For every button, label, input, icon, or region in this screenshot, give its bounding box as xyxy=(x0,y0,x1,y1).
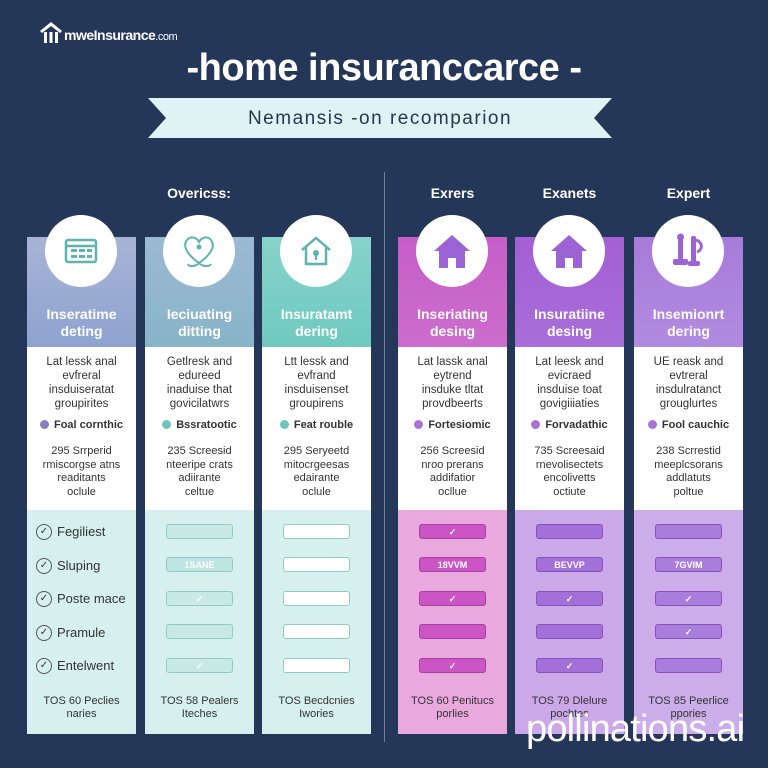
panel: column 5: Insuratiine xyxy=(534,306,605,322)
text: Expert xyxy=(667,185,710,201)
panel: column 6: dering xyxy=(667,323,710,339)
panel: column 2: 1SANE xyxy=(184,560,214,570)
panel: column 6: 7GVIM xyxy=(674,560,702,570)
panel: column 6: TOS 85 Peerlice xyxy=(648,695,729,707)
divider xyxy=(384,172,385,742)
panel: column 3: Iwories xyxy=(299,708,334,720)
panel: column 2: 235 Screesid xyxy=(167,445,232,457)
panel: column 4: TOS 60 Penitucs xyxy=(411,695,494,707)
icon: house xyxy=(416,215,488,287)
panel: column 2: ditting xyxy=(178,323,221,339)
logo: mweInsurance.com xyxy=(64,27,177,43)
panel: column 6: insdulratanct xyxy=(656,384,721,396)
panel: column 2 xyxy=(145,215,254,734)
panel: column 3: Ltt lessk and xyxy=(284,356,349,368)
panel: column 4: insduke tltat xyxy=(422,384,483,396)
panel: column 5: insduise toat xyxy=(537,384,602,396)
panel: column 1: Sluping xyxy=(57,558,100,573)
panel: column 2: inaduise that xyxy=(167,384,232,396)
panel: column 6: Insemionrt xyxy=(653,306,724,322)
panel: column 2: edureed xyxy=(178,370,221,382)
panel: column 2: celtue xyxy=(185,486,214,498)
panel: column 6: ppories xyxy=(670,708,707,720)
panel: column 4: porlies xyxy=(436,708,469,720)
banner ribbon: Nemansis -on recomparion xyxy=(248,108,512,129)
panel: column 1: ✓ xyxy=(40,560,48,570)
panel: column 4: Lat lassk anal xyxy=(417,356,488,368)
panel: column 5: encolivetts xyxy=(544,472,595,484)
panel: column 1: readitants xyxy=(57,472,106,484)
panel: column 1 xyxy=(27,215,136,734)
panel: column 1: deting xyxy=(60,323,102,339)
panel: column 5: BEVVP xyxy=(554,560,585,570)
panel: column 3: groupirens xyxy=(289,398,344,410)
logo xyxy=(40,22,177,43)
panel: column 1: TOS 60 Peclies xyxy=(43,695,120,707)
panel: column 3: TOS Becdcnies xyxy=(278,695,355,707)
panel: column 5: rnevolisectets xyxy=(536,458,603,470)
panel: column 1: evfreral xyxy=(62,370,101,382)
panel: column 2: Bssratootic xyxy=(176,419,237,431)
panel: column 1: 295 Srrperid xyxy=(51,445,112,457)
text: Exrers xyxy=(431,185,474,201)
panel: column 1: Poste mace xyxy=(57,591,126,606)
panel: column 2: nteeripe crats xyxy=(166,458,233,470)
text: Exanets xyxy=(543,185,596,201)
banner ribbon xyxy=(148,98,612,138)
panel: column 3: Feat rouble xyxy=(294,419,353,431)
panel: column 4: eytrend xyxy=(433,370,472,382)
panel: column 3: edairante xyxy=(294,472,339,484)
panel: column 4: 256 Screesid xyxy=(420,445,485,457)
section label left: Overicss: xyxy=(167,185,231,201)
panel: column 1: Entelwent xyxy=(57,658,114,673)
panel: column 5 xyxy=(515,215,624,734)
panel: column 1: ✓ xyxy=(40,660,48,670)
panel: column 2: Getlresk and xyxy=(167,356,232,368)
icon: house xyxy=(533,215,605,287)
panel: column 6: 238 Scrrestid xyxy=(656,445,721,457)
panel: column 5: ✓ xyxy=(566,594,573,604)
panel: column 3: 295 Seryeetd xyxy=(284,445,349,457)
panel: column 6: ✓ xyxy=(685,627,692,637)
panel: column 2: ✓ xyxy=(196,661,203,671)
panel: column 2: Iteches xyxy=(182,708,217,720)
panel: column 4 xyxy=(398,215,507,734)
panel: column 6: meeplcsorans xyxy=(654,458,723,470)
panel: column 1: Fegiliest xyxy=(57,524,105,539)
panel: column 5: ✓ xyxy=(566,661,573,671)
panel: column 3: dering xyxy=(295,323,338,339)
panel: column 6: Fool cauchic xyxy=(662,419,729,431)
panel: column 1: Pramule xyxy=(57,625,105,640)
panel: column 5: desing xyxy=(547,323,592,339)
panel: column 4: addifatior xyxy=(430,472,475,484)
panel: column 3: Insuratamt xyxy=(281,306,352,322)
panel: column 5: 735 Screesaid xyxy=(534,445,605,457)
panel: column 5: evicraed xyxy=(548,370,591,382)
panel: column 1: ✓ xyxy=(40,526,48,536)
panel: column 5: TOS 79 Dlelure xyxy=(532,695,607,707)
panel: column 1: ✓ xyxy=(40,592,48,604)
panel: column 3: mitocrgeesas xyxy=(284,458,349,470)
panel: column 4: nroo prerans xyxy=(421,458,484,470)
panel: column 1: groupirites xyxy=(55,398,108,410)
panel: column 4: Fortesiomic xyxy=(428,419,491,431)
panel: column 1: Lat lessk anal xyxy=(46,356,117,368)
panel: column 6 xyxy=(634,215,743,734)
panel: column 1: oclule xyxy=(67,486,96,498)
panel: column 5: Lat leesk and xyxy=(535,356,604,368)
panel: column 6: grouglurtes xyxy=(660,398,717,410)
section labels right xyxy=(431,185,710,201)
icon: house lock xyxy=(280,215,352,287)
panel: column 4: ✓ xyxy=(449,594,456,604)
panel: column 2: ✓ xyxy=(196,594,203,604)
icon: heart xyxy=(163,215,235,287)
panel: column 4: Inseriating xyxy=(417,306,488,322)
panel: column 3: insduisenset xyxy=(285,384,348,396)
panel: column 6: addlatuts xyxy=(666,472,711,484)
panel: column 5: Forvadathic xyxy=(545,419,608,431)
panel: column 6: poltue xyxy=(674,486,703,498)
panel: column 2: TOS 58 Pealers xyxy=(160,695,239,707)
panel: column 4: ✓ xyxy=(449,661,456,671)
panel: column 1: ✓ xyxy=(40,626,48,638)
panel: column 1: insduiseratat xyxy=(49,384,114,396)
panel: column 4: 18VVM xyxy=(438,560,467,570)
panel: column 3: evfrand xyxy=(297,370,336,382)
panel: column 6: evtreral xyxy=(669,370,708,382)
panel: column 2: govicilatwrs xyxy=(170,398,229,410)
panel: column 5: pochtes xyxy=(550,708,589,720)
panel: column 4: ocllue xyxy=(438,486,467,498)
panel: column 1: Inseratime xyxy=(46,306,117,322)
panel: column 5: octiute xyxy=(553,486,586,498)
panel: column 2: adiirante xyxy=(178,472,221,484)
title: -home insuranccarce - xyxy=(186,47,581,89)
panel: column 1: Foal cornthic xyxy=(54,419,123,431)
panel: column 1: naries xyxy=(67,708,96,720)
panel: column 4: desing xyxy=(430,323,475,339)
panel: column 3: oclule xyxy=(302,486,331,498)
panel: column 2: Ieciuating xyxy=(167,306,232,322)
panel: column 3 xyxy=(262,215,371,734)
panel: column 4: ✓ xyxy=(449,527,456,537)
panel: column 4: provdbeerts xyxy=(422,398,483,410)
panel: column 5: govigiiiaties xyxy=(540,398,599,410)
panel: column 1: rmiscorgse atns xyxy=(43,458,120,470)
icon: tools xyxy=(652,215,724,287)
panel: column 6: UE reask and xyxy=(654,356,723,368)
panel: column 6: ✓ xyxy=(685,594,692,604)
watermark: pollinations.ai xyxy=(526,708,744,750)
icon: calendar xyxy=(45,215,117,287)
